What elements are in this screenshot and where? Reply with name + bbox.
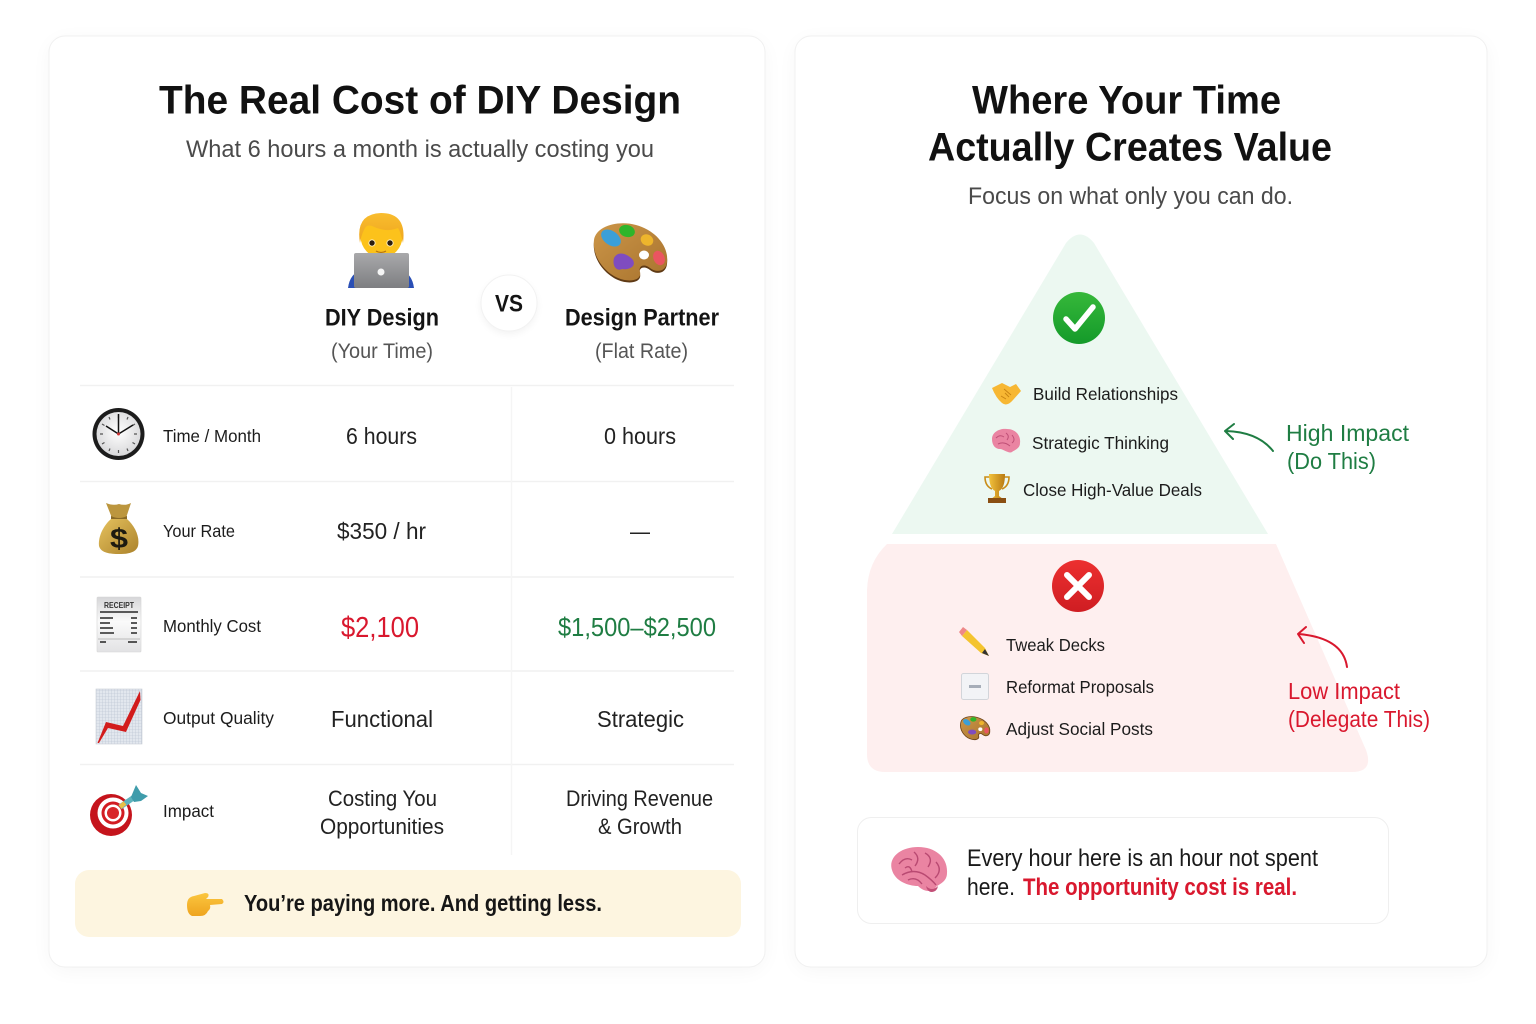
row: Your Rate: — [630,518,650,544]
icon: reformat card [962,674,988,700]
row: Monthly Cost: $2,100 [341,612,419,644]
label: low impact: Low Impact [1288,678,1401,704]
row: Your Rate: Your Rate [163,521,235,541]
row: Output Quality [96,689,684,744]
row: Your Rate [99,503,650,554]
subtitle: What 6 hours a month is actually costing you [186,136,654,163]
row: Time / Month [92,408,676,460]
row: Impact: & Growth [598,814,682,839]
row: Impact [90,785,713,839]
icon: clock [92,408,144,460]
VS badge: VS [495,290,523,318]
arrow: high impact [1225,424,1273,451]
icon: green check [1053,292,1105,344]
row: Impact: Impact [163,801,214,821]
callout banner: paying more: You’re paying more. And getting less. [244,890,602,916]
row: Monthly Cost [97,597,716,652]
pyramid top: high impact [892,234,1268,534]
label: low impact [1288,678,1430,732]
icon: chart with rising line [96,689,142,744]
icon: handshake [992,383,1021,404]
label: low impact: (Delegate This) [1288,706,1430,732]
icon: money bag: $ [110,523,128,554]
row: Output Quality: Functional [331,706,433,732]
pyramid top: high impact: Close High-Value Deals [1023,480,1202,500]
row: Monthly Cost: Monthly Cost [163,616,261,636]
icon: money bag [99,503,138,554]
column heading: DIY Design [325,304,439,363]
pyramid top: high impact: Strategic Thinking [1032,433,1169,453]
icon: trophy [985,474,1009,503]
callout: opportunity cost: The opportunity cost is real. [1023,874,1297,901]
pyramid base: low impact: Tweak Decks [1006,635,1105,655]
icon: receipt [97,597,141,652]
icon: receipt: RECEIPT [104,601,134,610]
row: Time / Month: Time / Month [163,426,261,446]
column heading: Design Partner: Design Partner [565,304,719,332]
row: Impact: Costing You [328,786,437,811]
title: Where Your Time [972,78,1281,122]
row: Impact: Driving Revenue [566,786,713,811]
icon: palette small [960,717,990,740]
row: Time / Month: 6 hours [346,423,417,449]
row: Time / Month: 0 hours [604,423,676,449]
label: high impact [1286,420,1410,474]
title: The Real Cost of DIY Design [159,78,681,122]
row: Output Quality: Strategic [597,706,684,732]
column heading: DIY Design: (Your Time) [331,340,433,363]
column heading: Design Partner: (Flat Rate) [595,340,688,363]
panel: DIY design cost comparison [49,36,765,971]
row: Monthly Cost: $1,500–$2,500 [558,612,716,642]
label: high impact: (Do This) [1287,448,1376,474]
pyramid base: low impact [867,544,1368,772]
icon: brain small [992,429,1020,452]
VS badge [481,275,537,334]
arrow: low impact [1298,627,1347,667]
row: Impact: Opportunities [320,814,444,839]
icon: pointing hand [187,893,224,916]
title [928,78,1332,170]
icon: artist palette [594,223,667,282]
callout banner: paying more [75,870,741,937]
icon: brain [891,847,947,892]
row: Output Quality: Output Quality [163,708,274,728]
subtitle: Focus on what only you can do. [968,183,1293,210]
pyramid base: low impact: Adjust Social Posts [1006,719,1153,739]
icon: red cross [1052,560,1104,612]
label: high impact: High Impact [1286,420,1410,446]
pyramid top: high impact: Build Relationships [1033,384,1178,404]
icon: pencil [959,627,989,656]
pyramid base: low impact: Reformat Proposals [1006,677,1154,697]
title: Actually Creates Value [928,126,1332,170]
callout: opportunity cost: here. [967,874,1015,901]
icon: target with dart [90,785,148,836]
column heading: DIY Design: DIY Design [325,304,439,332]
callout: opportunity cost [858,818,1388,924]
row: Your Rate: $350 / hr [337,518,426,544]
callout: opportunity cost: Every hour here is an hour not spent [967,845,1318,872]
icon: man with laptop [348,213,414,288]
column heading: Design Partner [565,304,719,363]
panel: where your time creates value [795,36,1487,971]
